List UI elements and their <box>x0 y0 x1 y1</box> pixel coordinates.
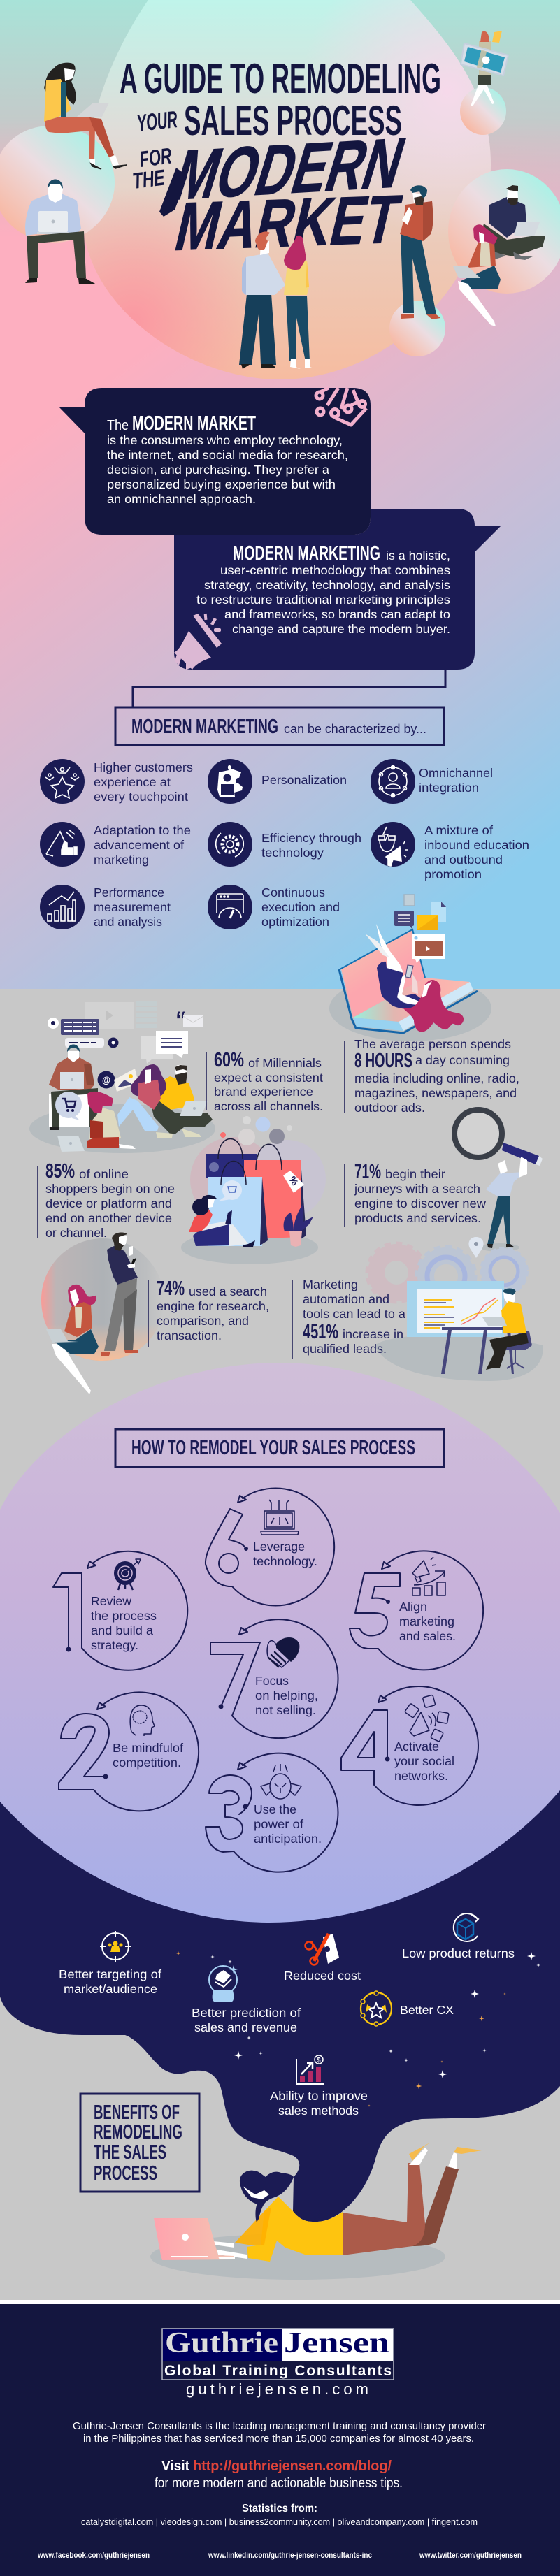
characteristic: continuous: optimization <box>261 915 329 929</box>
step 1: review the process: strategy. <box>91 1638 138 1652</box>
characteristic: omnichannel: Omnichannel <box>419 766 493 780</box>
title: THE <box>131 164 167 194</box>
icon: handshake heart <box>267 1637 299 1667</box>
stat: 74% research: used a search <box>189 1285 267 1298</box>
stat: 71% search engine: journeys with a search <box>354 1182 480 1196</box>
benefit: improve sales methods: Ability to improve <box>270 2089 368 2103</box>
stat: 85% of online shoppers: or channel. <box>45 1226 107 1240</box>
characteristic: higher customer experience: every touchpoint <box>94 790 188 804</box>
stat: 74% research: transaction. <box>157 1329 222 1343</box>
speech bubble: modern market: decision, and purchasing. They prefer a <box>107 463 329 477</box>
icon: puzzle person <box>217 765 243 797</box>
stat: 451% qualified leads: increase in <box>343 1327 403 1341</box>
icon: star with people <box>45 767 79 798</box>
characteristic: adaptation: advancement of <box>94 838 184 852</box>
stat: 8 hours: media including online, radio, <box>354 1071 519 1085</box>
characteristic: inbound and outbound: promotion <box>424 867 482 881</box>
step 5: align marketing and sales: marketing <box>399 1614 454 1628</box>
stat: 451% qualified leads: qualified leads. <box>303 1342 387 1356</box>
footer: visit call to action: for more modern and actionable business tips. <box>155 2476 403 2491</box>
benefit: better targeting: market/audience <box>64 1982 157 1996</box>
step 2: be mindful of competition <box>59 1692 199 1811</box>
stat: 60% of millennials <box>206 1049 323 1113</box>
heading box: benefits: BENEFITS OF <box>94 2101 180 2124</box>
speech bubble: modern market: the internet, and social media for research, <box>107 448 348 462</box>
characteristic: inbound and outbound: inbound education <box>424 838 529 852</box>
speech bubble: modern marketing: MODERN MARKETING <box>233 542 380 565</box>
benefit: better targeting: Better targeting of <box>59 1967 161 1981</box>
step 7: focus on helping: Focus <box>255 1674 289 1688</box>
icon: social megaphone <box>405 1695 449 1742</box>
characteristic: omnichannel <box>371 759 493 804</box>
benefit: improve sales methods: sales methods <box>278 2104 359 2118</box>
step 1: review the process: and build a <box>91 1623 153 1637</box>
stat: 60% of millennials: across all channels. <box>214 1099 323 1113</box>
stat: 74% research: 74% <box>157 1278 185 1300</box>
step 4: activate social networks: networks. <box>394 1769 448 1783</box>
icon: bars with trend <box>48 892 76 921</box>
stat: 71% search engine: engine to discover new <box>354 1196 486 1210</box>
stat: 85% of online shoppers <box>38 1160 175 1240</box>
illustration: woman reading on book <box>329 895 491 1041</box>
speech bubble: modern market <box>59 388 371 535</box>
speech bubble: modern market: The <box>107 418 129 433</box>
step 3: use the power of anticipation: Use the <box>254 1802 296 1816</box>
illustration: group with devices: “ <box>175 1007 187 1032</box>
benefit: better prediction: sales and revenue <box>194 2020 297 2034</box>
benefit: better prediction <box>192 1965 301 2034</box>
icon: magnet and megaphone <box>378 827 408 866</box>
small egg left <box>0 126 115 243</box>
stat: 8 hours: outdoor ads. <box>354 1101 425 1115</box>
gears <box>368 1244 526 1305</box>
icon: person in network <box>379 766 407 797</box>
background: hero gradient <box>0 0 560 989</box>
heading box: characterized by: MODERN MARKETING <box>131 716 278 738</box>
characteristic: omnichannel: integration <box>419 781 479 795</box>
step 1: review the process: Review <box>91 1594 131 1608</box>
heading box: characterized by <box>115 707 444 745</box>
characteristic: higher customer experience: Higher customers <box>94 760 193 774</box>
navy blob behind benefits <box>0 1747 560 2222</box>
stat: 8 hours: magazines, newspapers, and <box>354 1086 517 1100</box>
illustration: group with devices: @ <box>102 1074 110 1085</box>
small egg bottom <box>389 301 445 356</box>
characteristic: continuous <box>208 885 340 929</box>
heading box: how to remodel: HOW TO REMODEL YOUR SALES PROCESS <box>131 1437 415 1459</box>
benefit: low product returns: Low product returns <box>402 1946 515 1960</box>
characteristic: adaptation: marketing <box>94 853 149 867</box>
footer: about text: Guthrie-Jensen Consultants is the leading management training and consultancy provider <box>73 2420 486 2432</box>
icon: gear with arrows <box>216 833 243 857</box>
benefit: better CX <box>361 1991 454 2026</box>
background: grey section <box>0 989 560 2300</box>
logo: guthrie jensen: guthriejensen.com <box>186 2380 368 2398</box>
characteristic: efficiency <box>208 822 361 867</box>
logo: guthrie jensen: Global Training Consultants <box>164 2363 392 2379</box>
characteristic: performance: Performance <box>94 885 164 899</box>
illustration: gears and dashboard <box>368 1244 543 1381</box>
figure: man seated with laptop <box>25 179 96 284</box>
illustration: shopping bags <box>181 1116 326 1264</box>
step 5: align marketing and sales: Align <box>399 1600 427 1614</box>
step 6: leverage technology <box>206 1489 334 1606</box>
characteristic: inbound and outbound: A mixture of <box>424 823 493 837</box>
step 7: focus on helping: on helping, <box>255 1688 318 1702</box>
icon: bar chart with dollar: $ <box>317 2057 321 2064</box>
illustration: group with devices <box>29 1002 215 1153</box>
speech bubble: modern market: an omnichannel approach. <box>107 492 256 506</box>
footer: social links: www.linkedin.com/guthrie-jensen-consultants-inc <box>208 2552 373 2560</box>
floating media icons <box>394 895 446 963</box>
speech bubble: modern marketing: user-centric methodology that combines <box>220 563 450 577</box>
title <box>120 55 441 265</box>
heading box: characterized by: can be characterized by... <box>284 722 426 736</box>
icon: head with brain <box>130 1705 155 1736</box>
speech bubble: modern marketing <box>174 509 501 670</box>
logo: guthrie jensen: Guthrie <box>165 2327 278 2359</box>
characteristic: inbound and outbound <box>371 822 529 881</box>
step 4: activate social networks: Activate <box>394 1739 439 1753</box>
figure: couple seen from behind <box>239 231 314 369</box>
benefit: improve sales methods <box>270 2055 368 2118</box>
benefit: better targeting <box>59 1931 161 1996</box>
stat: 60% of millennials: 60% <box>214 1049 244 1071</box>
stat: 71% search engine: 71% <box>354 1161 381 1183</box>
characteristic: adaptation: Adaptation to the <box>94 823 191 837</box>
icon: crystal ball <box>209 1965 238 2002</box>
illustration: woman and thinking man on egg <box>41 1233 164 1394</box>
icon: circuit <box>316 388 366 425</box>
footer: about text <box>73 2420 486 2445</box>
footer: statistics sources <box>81 2503 478 2527</box>
step 2: be mindful of competition: competition. <box>113 1756 181 1770</box>
figure: seated pair on right egg <box>453 185 545 326</box>
logo: guthrie jensen <box>162 2327 394 2398</box>
stat: 8 hours: 8 HOURS <box>354 1050 412 1072</box>
stat: 8 hours: a day consuming <box>415 1053 510 1067</box>
step 7: focus on helping: not selling. <box>255 1703 316 1717</box>
characteristic: performance: measurement <box>94 900 171 914</box>
small egg top right <box>460 87 506 135</box>
step 4: activate social networks <box>341 1686 478 1805</box>
speech bubble: modern marketing: is a holistic, <box>386 549 450 563</box>
figure: woman with phone top right <box>461 31 508 106</box>
step 3: use the power of anticipation: power of <box>254 1817 303 1831</box>
logo: guthrie jensen: Jensen <box>284 2327 389 2359</box>
icon: laptop with circuits <box>261 1500 299 1535</box>
characteristic: inbound and outbound: and outbound <box>424 853 503 867</box>
figure: standing bearded man <box>400 185 440 319</box>
stat: 71% search engine: begin their <box>385 1167 445 1181</box>
stat: 85% of online shoppers: 85% <box>45 1160 75 1182</box>
characteristic: efficiency: technology <box>261 846 324 860</box>
characteristic: adaptation <box>40 822 191 867</box>
step 5: align marketing and sales: and sales. <box>399 1629 456 1643</box>
purple circle panel <box>0 1363 560 1923</box>
stat: 8 hours <box>345 1037 519 1115</box>
footer: social links: www.facebook.com/guthriejensen <box>37 2552 150 2560</box>
characteristic: continuous: Continuous <box>261 885 325 899</box>
footer panel <box>0 2304 560 2576</box>
icon: megaphone with bars <box>412 1557 445 1595</box>
benefit: better prediction: Better prediction of <box>192 2006 301 2020</box>
stat: 85% of online shoppers: end on another device <box>45 1211 172 1225</box>
icon: megaphone and thumb up <box>46 830 77 856</box>
benefit: reduced cost <box>284 1934 361 1983</box>
characteristic: performance <box>40 885 171 929</box>
connector line <box>133 670 445 707</box>
stat: 451% qualified leads: tools can lead to a <box>303 1307 405 1321</box>
speech bubble: modern market: is the consumers who employ technology, <box>107 433 343 447</box>
stat: 451% qualified leads: Marketing <box>303 1278 358 1291</box>
characteristic: personalization <box>208 759 347 804</box>
stat: 74% research <box>148 1278 269 1347</box>
stat: 8 hours: The average person spends <box>354 1037 511 1051</box>
heading box: benefits: PROCESS <box>94 2162 157 2185</box>
divider strip <box>0 2300 560 2304</box>
speech bubble: modern market: personalized buying experience but with <box>107 477 336 491</box>
footer: social links: www.twitter.com/guthriejensen <box>419 2552 522 2560</box>
icon: box with return arrow <box>454 1913 478 1941</box>
small egg right <box>448 169 560 294</box>
step 6: leverage technology: technology. <box>253 1554 317 1568</box>
figure: woman on egg with laptop <box>44 63 127 169</box>
heading box: how to remodel <box>115 1429 444 1467</box>
stat: 85% of online shoppers: shoppers begin on one <box>45 1182 175 1196</box>
icon: target <box>114 1559 141 1590</box>
floating bubbles <box>220 1116 292 1145</box>
step 4: activate social networks: your social <box>394 1754 454 1768</box>
stat: 85% of online shoppers: of online <box>79 1167 129 1181</box>
icon: window and gauge <box>217 894 243 918</box>
stat: 451% qualified leads: automation and <box>303 1292 389 1306</box>
step 3: use the power of anticipation <box>206 1753 338 1872</box>
illustration: shopping bags: % <box>287 1174 301 1187</box>
stat: 71% search engine: products and services. <box>354 1211 481 1225</box>
title: MODERN <box>165 123 414 215</box>
icon: target audience <box>100 1931 131 1962</box>
step 6: leverage technology: Leverage <box>253 1540 305 1554</box>
footer: about text: in the Philippines that has serviced more than 15,000 companies for almost 40 years. <box>83 2433 474 2445</box>
stat: 60% of millennials: expect a consistent <box>214 1071 323 1085</box>
stat: 60% of millennials: brand experience <box>214 1085 313 1099</box>
footer: social links <box>37 2552 522 2560</box>
sparkles <box>176 1951 540 2107</box>
big egg behind title <box>82 0 491 379</box>
heading box: benefits <box>80 2094 199 2192</box>
step 1: review the process <box>53 1551 187 1670</box>
icon: scissors and money <box>305 1934 339 1965</box>
characteristic: efficiency: Efficiency through <box>261 831 361 845</box>
heading box: benefits: THE SALES <box>94 2141 166 2164</box>
step 2: be mindful of competition: Be mindfulof <box>113 1741 183 1755</box>
benefit: low product returns <box>402 1913 515 1960</box>
stat: 85% of online shoppers: device or platform and <box>45 1196 172 1210</box>
icon: megaphone <box>174 614 222 670</box>
characteristic: continuous: execution and <box>261 900 340 914</box>
speech bubble: modern marketing: to restructure traditional marketing principles <box>196 593 450 607</box>
speech bubble: modern marketing: and frameworks, so brands can adapt to <box>224 607 450 621</box>
illustration: man with magnifying glass <box>454 1110 543 1258</box>
characteristic: performance: and analysis <box>94 915 162 929</box>
stat: 71% search engine <box>345 1161 486 1227</box>
stat: 74% research: engine for research, <box>157 1299 269 1313</box>
heading box: benefits: REMODELING <box>94 2121 182 2143</box>
speech bubble: modern marketing: strategy, creativity, technology, and analysis <box>204 578 450 592</box>
step 7: focus on helping <box>210 1619 338 1738</box>
speech bubble: modern market: MODERN MARKET <box>132 412 256 435</box>
title: YOUR <box>136 106 179 137</box>
stat: 451% qualified leads <box>292 1278 405 1359</box>
stat: 451% qualified leads: 451% <box>303 1321 338 1343</box>
dashboard charts <box>424 1298 498 1328</box>
footer: visit call to action: http://guthriejensen.com/blog/ <box>193 2459 392 2474</box>
title: SALES PROCESS <box>184 97 402 144</box>
title: MARKET <box>168 181 407 265</box>
step 1: review the process: the process <box>91 1609 157 1623</box>
illustration: woman lying with laptop <box>150 2143 482 2280</box>
footer: visit call to action <box>155 2459 403 2491</box>
icon: thinking face <box>261 1764 301 1799</box>
characteristic: higher customer experience: experience at <box>94 775 171 789</box>
benefit: reduced cost: Reduced cost <box>284 1969 361 1983</box>
stat: 74% research: comparison, and <box>157 1314 249 1328</box>
title: FOR <box>138 143 173 172</box>
speech bubble: modern marketing: change and capture the modern buyer. <box>232 622 450 636</box>
characteristic: higher customer experience <box>40 759 193 804</box>
step 3: use the power of anticipation: anticipation. <box>254 1832 322 1846</box>
step 5: align marketing and sales <box>350 1551 483 1670</box>
footer: visit call to action: Visit <box>161 2459 189 2474</box>
characteristic: personalization: Personalization <box>261 773 347 787</box>
icon: star in yellow ring <box>361 1991 392 2026</box>
benefit: better CX: Better CX <box>400 2003 454 2017</box>
stat: 60% of millennials: of Millennials <box>248 1056 322 1070</box>
footer: statistics sources: catalystdigital.com | vieodesign.com | business2community.com | oliveandcompany.com | fingent.com <box>81 2517 478 2527</box>
footer: statistics sources: Statistics from: <box>242 2503 317 2515</box>
